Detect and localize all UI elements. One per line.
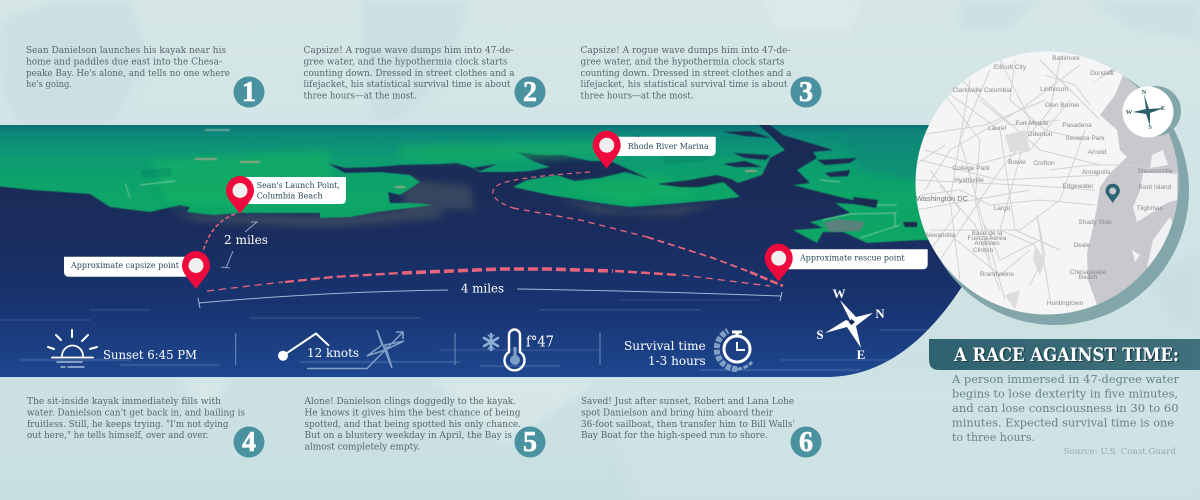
panel: step 3: lifejacket, his statistical survival time is about bbox=[580, 80, 788, 90]
panel: step 2: gree water, and the hypothermia clock starts bbox=[304, 57, 508, 67]
map labels: Edgewater bbox=[1062, 183, 1094, 190]
body text: A person immersed in 47-degree water bbox=[951, 372, 1180, 386]
pin label: rescue point: Approximate rescue point bbox=[799, 254, 905, 264]
water bbox=[0, 125, 1000, 377]
route: launch to capsize bbox=[203, 214, 235, 251]
panel: step 2: three hours—at the most. bbox=[304, 92, 417, 102]
map labels: Fuerza Aérea bbox=[967, 235, 1007, 242]
panel: step 1: he's going. bbox=[26, 80, 72, 90]
weather: wind speed: 12 knots bbox=[307, 346, 359, 360]
water streaks bbox=[0, 300, 930, 370]
heading banner bbox=[929, 339, 1200, 370]
panel: step 5: But on a blustery weekday in April, the Bay is bbox=[304, 431, 512, 441]
map labels: Dundalk bbox=[1090, 70, 1115, 77]
panel: a race against time bbox=[929, 339, 1200, 457]
body text: and can lose consciousness in 30 to 60 bbox=[952, 401, 1179, 415]
map labels bbox=[916, 55, 1173, 307]
map labels: Andrews bbox=[974, 240, 1000, 247]
panel: step 4: out here," he tells himself, over and over. bbox=[27, 431, 209, 441]
pin label: launch point: Columbia Beach bbox=[257, 192, 323, 202]
map labels: Base de la bbox=[972, 230, 1003, 237]
map labels: Glen Burnie bbox=[1045, 102, 1080, 109]
panel: step 5: almost completely empty. bbox=[304, 443, 420, 453]
icon: compass rose: N bbox=[875, 306, 885, 321]
icon: map compass badge: S bbox=[1148, 124, 1152, 131]
icon: map compass badge bbox=[1122, 86, 1181, 138]
panel: step 4 bbox=[27, 397, 264, 458]
map labels: Washington DC bbox=[916, 194, 969, 203]
land masses bbox=[0, 125, 929, 244]
map labels: Kent Island bbox=[1139, 184, 1172, 191]
pin label: launch point: Sean's Launch Point, bbox=[257, 181, 340, 191]
panel: step 6: Saved! Just after sunset, Robert and Lana Lohe bbox=[581, 397, 794, 407]
pin label: Rhode River Marina bbox=[610, 137, 716, 156]
panel: step 2 bbox=[304, 46, 546, 108]
panel: step 1: 1 bbox=[242, 77, 256, 108]
panel: step 5: Alone! Danielson clings doggedly to the kayak. bbox=[304, 397, 516, 407]
map labels: Ellicott City bbox=[994, 64, 1027, 71]
map labels: Linthicum bbox=[1040, 86, 1068, 93]
land colour variation bbox=[156, 140, 920, 210]
icon: compass rose bbox=[816, 286, 885, 362]
route: capsize to rescue bbox=[207, 269, 770, 291]
icon: map compass badge: E bbox=[1161, 105, 1165, 112]
panel: satellite bay map band bbox=[0, 120, 1000, 377]
map labels: Baltimore bbox=[1052, 55, 1080, 62]
map labels: Stevensville bbox=[1138, 168, 1173, 175]
weather: sunset time: Sunset 6:45 PM bbox=[103, 348, 197, 362]
icon: map location pin bbox=[1106, 184, 1120, 203]
map water bbox=[1087, 68, 1178, 304]
panel: step 4: 4 bbox=[242, 427, 256, 458]
heading: A RACE AGAINST TIME: bbox=[953, 345, 1179, 366]
icon: compass rose: E bbox=[857, 347, 865, 362]
icon: compass rose: S bbox=[816, 327, 824, 342]
panel: step 5: spotted, and that being spotted his only chance. bbox=[304, 420, 521, 430]
panel: step 3: counting down. Dressed in street clothes and a bbox=[580, 69, 792, 79]
panel: step 5: He knows it gives him the best chance of being bbox=[304, 408, 521, 418]
map labels: Tilghman bbox=[1137, 205, 1164, 212]
panel: step 1: Sean Danielson launches his kayak near his bbox=[26, 46, 226, 56]
map roads bbox=[915, 60, 1180, 300]
icon: sunset bbox=[48, 330, 97, 367]
map labels: College Park bbox=[952, 165, 990, 172]
source: Source: U.S. Coast Guard bbox=[1064, 447, 1177, 457]
map labels: Alexandria bbox=[925, 232, 956, 239]
pin label: launch point bbox=[245, 177, 346, 204]
panel: step 3: gree water, and the hypothermia clock starts bbox=[580, 57, 785, 67]
icon: rescue point pin bbox=[765, 244, 793, 282]
body text: to three hours. bbox=[952, 430, 1035, 444]
panel: step 6: spot Danielson and bring him aboard their bbox=[581, 408, 774, 418]
body text: minutes. Expected survival time is one bbox=[952, 416, 1174, 430]
map land: eastern shore bbox=[1132, 150, 1180, 267]
weather: survival time: 1-3 hours bbox=[648, 354, 706, 368]
panel: step 2: counting down. Dressed in street clothes and a bbox=[304, 69, 515, 79]
map labels: Clarksville Columbia bbox=[953, 87, 1012, 94]
map labels: Chesapeake bbox=[1070, 269, 1107, 276]
panel: step 6: 36-foot sailboat, then transfer him to Bill Walls' bbox=[581, 420, 795, 430]
map labels: Odenton bbox=[1028, 131, 1053, 138]
pin label: capsize point: Approximate capsize point bbox=[70, 261, 180, 271]
map labels: Bowie bbox=[1008, 159, 1026, 166]
icon: wind gauge bbox=[278, 330, 404, 368]
pin label: capsize point bbox=[64, 257, 196, 277]
distance marker: 2 miles bbox=[221, 222, 268, 268]
icon: capsize point pin bbox=[182, 251, 210, 289]
map labels: Annapolis bbox=[1082, 169, 1111, 176]
map labels: Crofton bbox=[1033, 160, 1055, 167]
map labels: Clinton bbox=[973, 247, 994, 254]
map labels: Beach bbox=[1079, 274, 1098, 281]
map labels: Huntingtown bbox=[1047, 300, 1083, 307]
panel: step 6: Bay Boat for the high-speed run to shore. bbox=[581, 431, 768, 441]
pin label: rescue point bbox=[782, 249, 928, 269]
body text: begins to lose dexterity in five minutes, bbox=[952, 386, 1178, 400]
icon: snowflake bbox=[484, 334, 498, 350]
icon: launch point pin bbox=[226, 176, 254, 214]
icon: thermometer bbox=[504, 330, 524, 370]
panel: step 2: lifejacket, his statistical survival time is about bbox=[304, 80, 511, 90]
panel: step 2: Capsize! A rogue wave dumps him into 47-de- bbox=[304, 46, 514, 56]
map labels: Severna Park bbox=[1065, 135, 1105, 142]
icon: stopwatch bbox=[717, 331, 752, 369]
weather: water temperature: f°47 bbox=[526, 333, 554, 351]
icon: compass rose: W bbox=[832, 286, 846, 301]
map labels: Shady Side bbox=[1078, 219, 1112, 226]
map labels: Hyattsville bbox=[954, 177, 984, 184]
weather: survival time: Survival time bbox=[624, 339, 706, 353]
icon: map compass badge: W bbox=[1126, 109, 1133, 116]
distance marker: 2 miles: 2 miles bbox=[224, 233, 268, 247]
route: rescue to marina bbox=[493, 172, 783, 286]
shallow water glow bbox=[170, 180, 720, 228]
map labels: Brandywine bbox=[980, 271, 1014, 278]
map labels: Arnold bbox=[1088, 149, 1107, 156]
map labels: Fort Meade bbox=[1015, 120, 1049, 127]
panel: step 3: three hours—at the most. bbox=[580, 92, 694, 102]
map labels: Deale bbox=[1074, 242, 1091, 249]
distance marker: 4 miles bbox=[198, 282, 782, 308]
panel: step 3: 3 bbox=[799, 77, 813, 108]
panel: step 3: Capsize! A rogue wave dumps him into 47-de- bbox=[580, 46, 790, 56]
panel: step 1 bbox=[26, 46, 264, 108]
map labels: Laurel bbox=[988, 125, 1007, 132]
icon: marina pin bbox=[593, 131, 621, 169]
distance marker: 4 miles: 4 miles bbox=[461, 282, 504, 296]
icon: map compass badge: N bbox=[1142, 89, 1147, 96]
panel: step 6: 6 bbox=[799, 427, 813, 458]
map labels: Pasadena bbox=[1062, 122, 1092, 129]
panel: step 4: The sit-inside kayak immediately fills with bbox=[27, 397, 221, 407]
panel: step 4: water. Danielson can't get back in, and bailing is bbox=[27, 408, 245, 418]
land inlets bbox=[473, 131, 917, 227]
map labels: Largo bbox=[994, 205, 1011, 212]
panel: step 2: 2 bbox=[523, 77, 537, 108]
panel: step 6 bbox=[581, 397, 822, 458]
panel: step 5: 5 bbox=[523, 427, 537, 458]
land texture bbox=[125, 129, 900, 238]
pin label: Rhode River Marina: Rhode River Marina bbox=[628, 142, 709, 152]
panel: step 4: fruitless. Still, he keeps trying. "I'm not dying bbox=[27, 420, 229, 430]
panel: step 3 bbox=[580, 46, 822, 108]
panel: step 1: peake Bay. He's alone, and tells no one where bbox=[26, 69, 230, 79]
locator map bbox=[915, 40, 1200, 325]
panel: step 1: home and paddles due east into the Chesa- bbox=[26, 57, 222, 67]
panel: step 5 bbox=[304, 397, 546, 458]
